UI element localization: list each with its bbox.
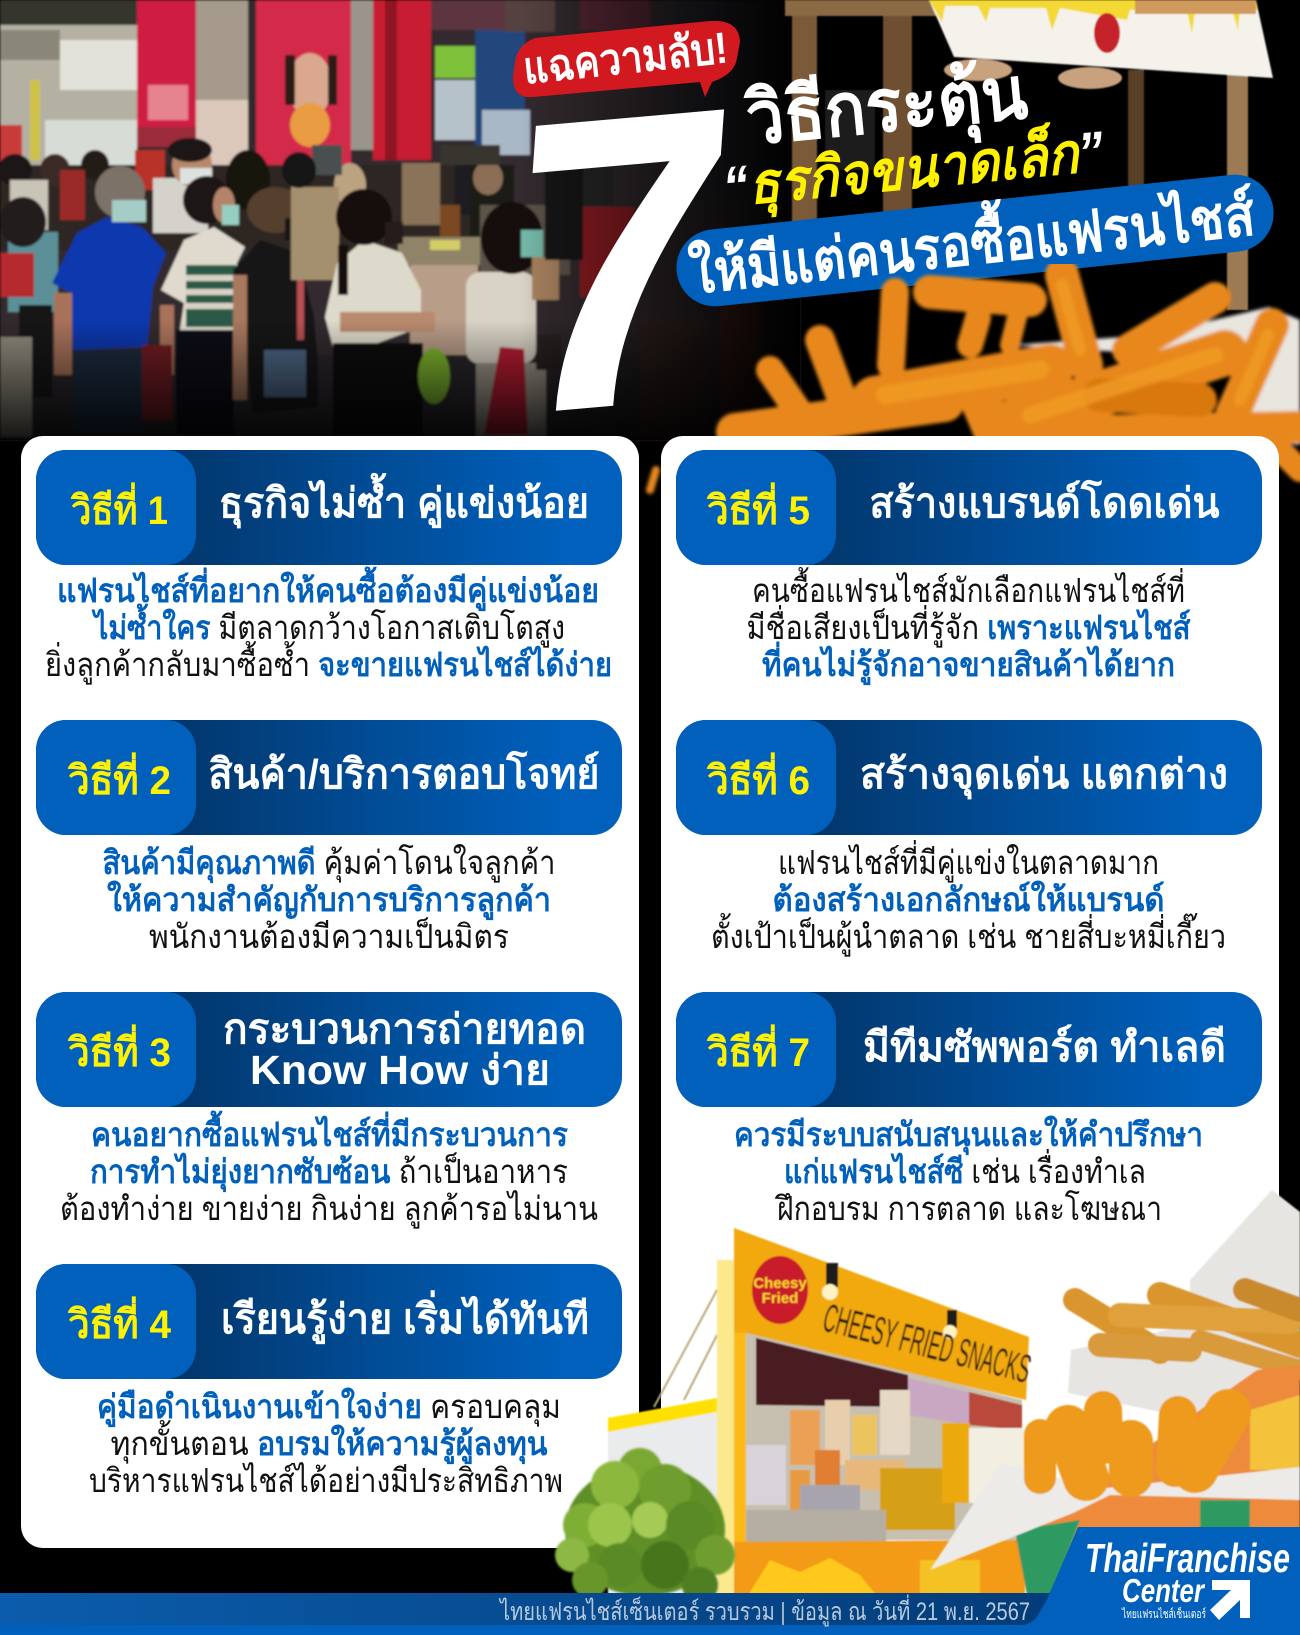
step 5 text	[746, 567, 1191, 686]
step 1 text	[45, 566, 612, 685]
step 5 header: สร้างแบรนด์โดดเด่น	[870, 479, 1220, 526]
step 4 text: ทุกขั้นตอน อบรมให้ความรู้ผู้ลงทุน	[110, 1420, 548, 1465]
plaid shirt man	[282, 152, 339, 280]
step 6 text: แฟรนไชส์ที่มีคู่แข่งในตลาดมาก	[778, 840, 1159, 883]
icon: arrow	[1210, 1580, 1250, 1620]
step 7	[676, 992, 1262, 1227]
step 4 text: คู่มือดำเนินงานเข้าใจง่าย ครอบคลุม	[97, 1387, 561, 1428]
logo: ThaiFranchise Center	[1030, 1527, 1300, 1635]
step 5 text: ที่คนไม่รู้จักอาจขายสินค้าได้ยาก	[762, 641, 1175, 686]
step 4	[36, 1264, 622, 1499]
step 2 text	[102, 844, 556, 955]
photo: wooden stall with awning	[785, 0, 1273, 310]
step 6 text	[711, 840, 1226, 957]
logo: ThaiFranchise Center: ไทยแฟรนไชส์เซ็นเตอร์	[1121, 1606, 1206, 1621]
blue shirt man	[52, 166, 166, 434]
step 3 header: Know How ง่าย	[250, 1047, 550, 1093]
step 1 header: วิธีที่ 1	[71, 482, 168, 533]
photo fade overlays	[0, 0, 800, 440]
headline group	[492, 18, 1277, 505]
step 1 text: แฟรนไชส์ที่อยากให้คนซื้อต้องมีคู่แข่งน้อย	[57, 566, 599, 612]
step 1 text: ไม่ซ้ำใคร มีตลาดกว้างโอกาสเติบโตสูง	[91, 603, 565, 648]
step 7 header	[676, 992, 1262, 1107]
step 6 text: ต้องสร้างเอกลักษณ์ให้แบรนด์	[772, 880, 1164, 918]
step 5 header: วิธีที่ 5	[706, 482, 810, 533]
step 1 header: ธุรกิจไม่ซ้ำ คู่แข่งน้อย	[219, 473, 589, 529]
photo: cheesy fried snacks kiosk: Fried	[762, 1290, 798, 1307]
footer source bar	[0, 1593, 1300, 1635]
step 1 text: ยิ่งลูกค้ากลับมาซื้อซ้ำ จะขายแฟรนไชส์ได้ง่าย	[45, 641, 612, 685]
step 2 header: วิธีที่ 2	[67, 752, 171, 803]
step 2 text: สินค้ามีคุณภาพดี คุ้มค่าโดนใจลูกค้า	[102, 844, 556, 884]
background shoppers right	[580, 207, 634, 297]
step 5 text: คนซื้อแฟรนไชส์มักเลือกแฟรนไชส์ที่	[752, 567, 1185, 609]
step 1	[36, 450, 622, 685]
panel: right column	[661, 436, 1279, 1606]
step 3 header: วิธีที่ 3	[67, 1024, 171, 1075]
step 6	[676, 720, 1262, 957]
step 3	[36, 992, 622, 1229]
step 2 text: พนักงานต้องมีความเป็นมิตร	[149, 917, 509, 955]
step 4 header: เรียนรู้ง่าย เริ่มได้ทันที	[221, 1290, 589, 1345]
step 2	[36, 720, 622, 955]
step 5 header	[676, 450, 1262, 565]
step 5	[676, 450, 1262, 686]
heading line 1: วิธีกระตุ้น	[741, 51, 1031, 166]
white shirt girl	[466, 202, 561, 438]
striped shirt woman	[160, 176, 245, 435]
big number seven: 7	[492, 18, 748, 505]
fries highlight layer	[885, 285, 1268, 415]
step 7 text: แก่แฟรนไชส์ซี เช่น เรื่องทำเล	[784, 1149, 1146, 1190]
step 6 text: ตั้งเป้าเป็นผู้นำตลาด เช่น ชายสี่บะหมี่เกี๊ยว	[711, 912, 1226, 957]
bag between people	[142, 345, 172, 420]
source note: ไทยแฟรนไชส์เซ็นเตอร์ รวบรวม | ข้อมูล ณ วันที่ 21 พ.ย. 2567	[498, 1594, 1030, 1627]
left small people	[8, 232, 58, 312]
step 7 text: ฝึกอบรม การตลาด และโฆษณา	[774, 1190, 1162, 1227]
fries base layer	[650, 275, 1300, 490]
logo: ThaiFranchise Center: Center	[1122, 1572, 1206, 1609]
step 4 text	[89, 1387, 563, 1499]
white blouse woman	[325, 189, 435, 435]
step 2 header	[36, 720, 622, 835]
heading line 2: “ธุรกิจขนาดเล็ก”	[720, 117, 1107, 222]
back row heads	[0, 154, 32, 186]
step 7 text	[734, 1115, 1203, 1227]
photo: cheesy fried snacks kiosk	[608, 1228, 1035, 1600]
dark top woman	[233, 187, 318, 413]
step 6 header: วิธีที่ 6	[706, 752, 810, 803]
step 7 header: มีทีมซัพพอร์ต ทำเลดี	[863, 1024, 1226, 1070]
step 3 header	[36, 992, 622, 1107]
photo: cheesy fries in paper	[650, 275, 1300, 490]
photo: green tree	[555, 1448, 735, 1603]
infographic canvas: CHEESY FRIED SNACKS	[819, 1296, 1035, 1392]
step 2 text: ให้ความสำคัญกับการบริการลูกค้า	[107, 880, 551, 921]
photo: crowd at franchise expo	[0, 0, 800, 440]
step 2 header: สินค้า/บริการตอบโจทย์	[208, 750, 600, 797]
step 4 header	[36, 1264, 622, 1379]
step 3 text	[60, 1110, 598, 1229]
step 4 text: บริหารแฟรนไชส์ได้อย่างมีประสิทธิภาพ	[89, 1462, 563, 1499]
step 3 header: กระบวนการถ่ายทอด	[223, 1006, 586, 1052]
panel: left column	[21, 436, 639, 1548]
step 5 text: มีชื่อเสียงเป็นที่รู้จัก เพราะแฟรนไชส์	[746, 605, 1191, 648]
step 3 text: คนอยากซื้อแฟรนไชส์ที่มีกระบวนการ	[91, 1110, 568, 1153]
red bag	[484, 347, 528, 435]
green bag	[418, 348, 450, 404]
table with products	[398, 237, 480, 265]
step 7 text: ควรมีระบบสนับสนุนและให้คำปรึกษา	[734, 1115, 1203, 1156]
badge: red speech bubble: แฉความลับ!	[521, 23, 730, 94]
step 3 text: ต้องทำง่าย ขายง่าย กินง่าย ลูกค้ารอไม่นาน	[60, 1190, 598, 1229]
photo: cheesy fried snacks kiosk: Cheesy	[753, 1275, 807, 1292]
step 1 header	[36, 450, 622, 565]
step 6 header: สร้างจุดเด่น แตกต่าง	[860, 751, 1228, 800]
photo: cheese sticks and fries in box	[930, 1190, 1300, 1600]
step 3 text: การทำไม่ยุ่งยากซับซ้อน ถ้าเป็นอาหาร	[90, 1152, 568, 1193]
step 4 header: วิธีที่ 4	[67, 1296, 172, 1347]
step 7 header: วิธีที่ 7	[706, 1024, 810, 1075]
step 6 header	[676, 720, 1262, 835]
